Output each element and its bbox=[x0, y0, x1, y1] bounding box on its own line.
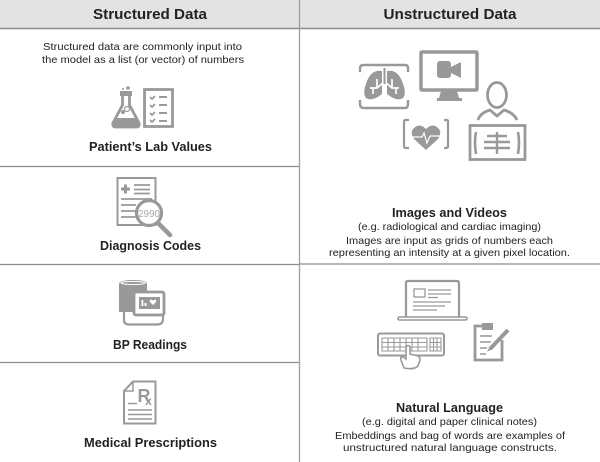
header: unstructured data: Unstructured Data bbox=[384, 7, 517, 23]
header: structured data bbox=[0, 0, 299, 28]
label: medical prescriptions: Medical Prescriptions bbox=[84, 436, 217, 450]
icon: video monitor bbox=[421, 52, 477, 101]
icon: prescription document: R bbox=[138, 386, 150, 406]
icon group: natural language bbox=[378, 281, 508, 369]
icon: keyboard with hand bbox=[378, 334, 444, 369]
icon: lungs scan bbox=[360, 65, 408, 108]
label block: images and videos: (e.g. radiological and cardiac imaging) bbox=[358, 221, 541, 233]
icon: heart monitor bbox=[404, 120, 448, 150]
label block: natural language: Natural Language bbox=[396, 401, 503, 415]
label block: natural language: Embeddings and bag of words are examples of bbox=[335, 430, 565, 442]
label block: images and videos: representing an intensity at a given pixel location. bbox=[329, 247, 570, 259]
label: bp readings: BP Readings bbox=[113, 338, 187, 352]
icon: person with x-ray bbox=[470, 82, 525, 160]
icon: clipboard with pen bbox=[475, 323, 508, 360]
label block: images and videos: Images are input as grids of numbers each bbox=[346, 235, 553, 247]
label block: images and videos: Images and Videos bbox=[392, 206, 507, 220]
label block: natural language bbox=[335, 401, 565, 454]
structured data description bbox=[42, 41, 244, 66]
label block: natural language: (e.g. digital and paper clinical notes) bbox=[362, 416, 537, 428]
icon: blood pressure monitor bbox=[119, 280, 164, 324]
header: structured data: Structured Data bbox=[93, 7, 208, 23]
structured data description: the model as a list (or vector) of numbers bbox=[42, 54, 244, 66]
icon: prescription document: x bbox=[145, 394, 152, 408]
icon: diagnosis code magnifier: 2990 bbox=[138, 209, 160, 220]
label: patient's lab values: Patient’s Lab Values bbox=[89, 140, 212, 154]
icon group: images and videos bbox=[360, 52, 525, 160]
icon: laptop bbox=[398, 281, 467, 320]
icon: prescription document bbox=[124, 382, 156, 424]
label: diagnosis codes: Diagnosis Codes bbox=[100, 239, 201, 253]
label block: images and videos bbox=[329, 206, 570, 259]
icon: flask and checklist bbox=[113, 86, 172, 127]
icon: diagnosis code magnifier bbox=[118, 178, 170, 235]
structured data description: Structured data are commonly input into bbox=[43, 41, 242, 53]
header: unstructured data bbox=[300, 0, 600, 28]
label block: natural language: unstructured natural language constructs. bbox=[343, 442, 557, 454]
